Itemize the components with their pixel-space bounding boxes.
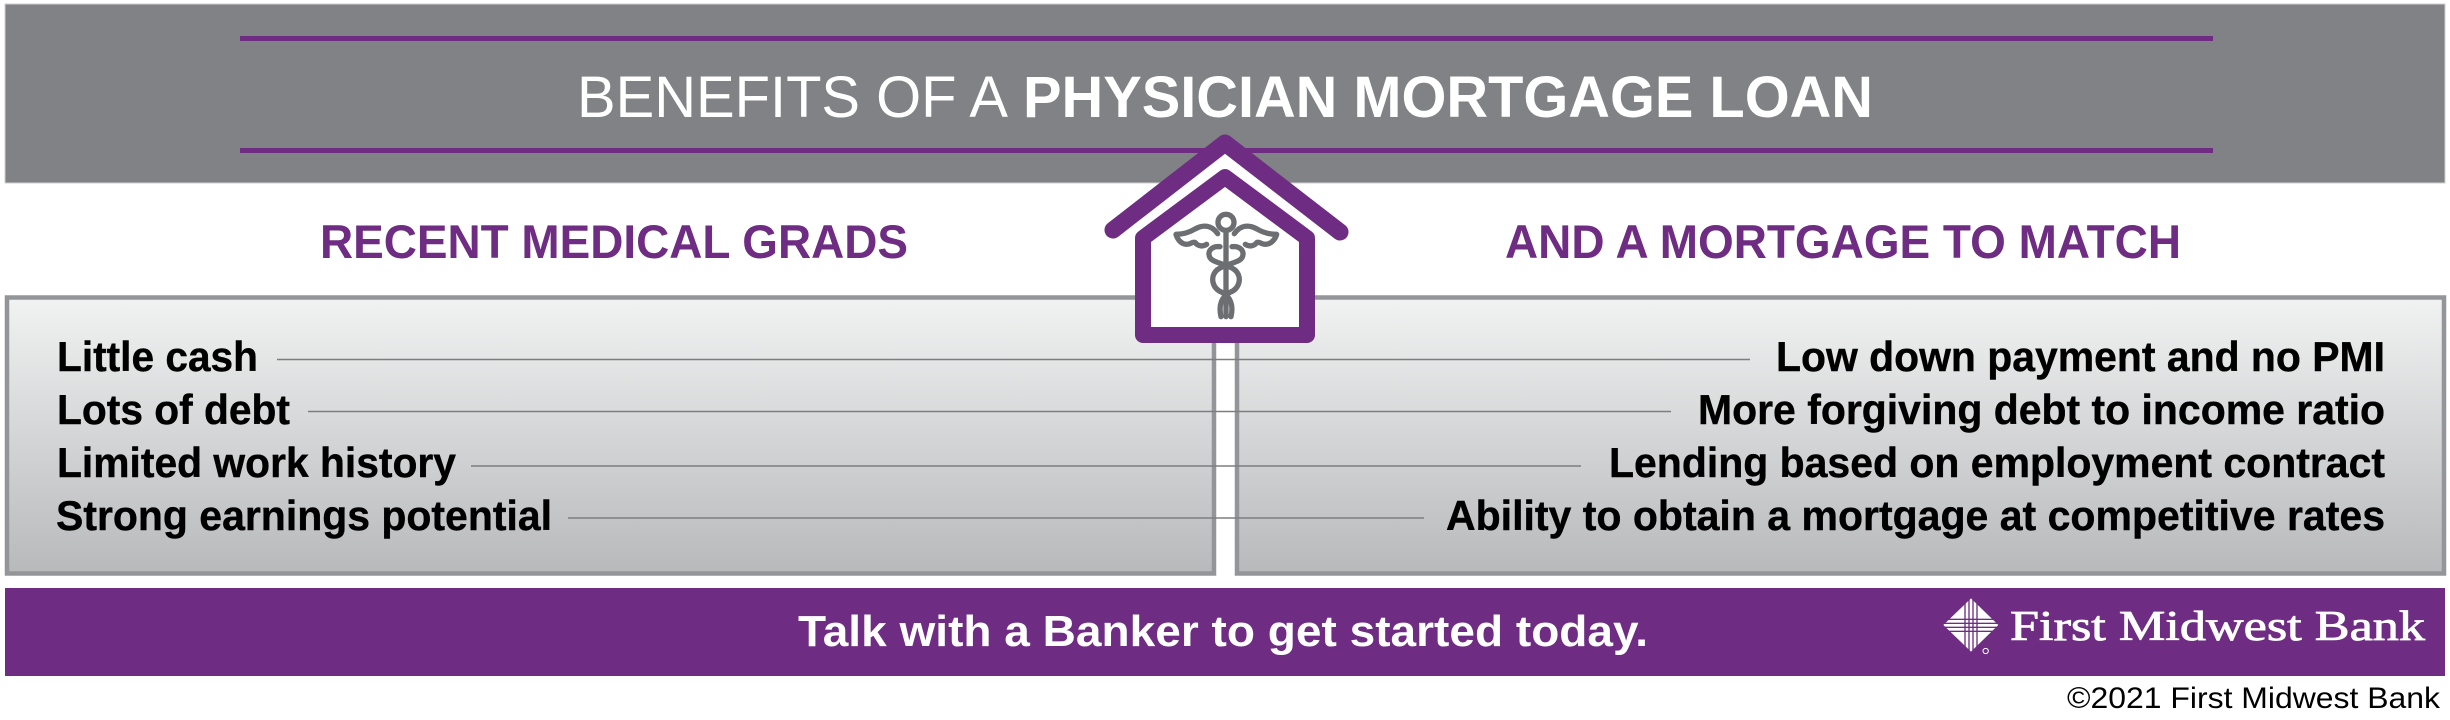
icon: bank logo — [1942, 597, 2000, 654]
text: little cash: Little cash — [57, 333, 258, 380]
copyright: ©2021 First Midwest Bank — [2067, 682, 2441, 715]
text: lots of debt: Lots of debt — [57, 386, 290, 433]
text: strong earnings potential: Strong earnings potential — [56, 492, 552, 539]
icon: house with caduceus — [1113, 143, 1340, 335]
bank name: First Midwest Bank — [2010, 604, 2425, 650]
title: BENEFITS OF A — [577, 65, 1008, 130]
icon: caduceus — [1176, 214, 1277, 317]
text: limited work history: Limited work history — [57, 439, 456, 486]
text: low down payment: Low down payment and no PMI — [1776, 333, 2385, 380]
title: PHYSICIAN MORTGAGE LOAN — [1023, 65, 1873, 130]
panel: a mortgage to match — [1237, 298, 2444, 574]
footer bar — [5, 588, 2445, 676]
call to action: Talk with a Banker to get started today. — [798, 607, 1648, 656]
panel: recent medical grads — [7, 298, 1214, 574]
connector lines — [277, 360, 1750, 518]
heading: recent medical grads: RECENT MEDICAL GRADS — [320, 215, 908, 268]
heading: and a mortgage to match: AND A MORTGAGE TO MATCH — [1505, 215, 2181, 268]
header banner — [5, 4, 2445, 183]
text: debt to income: More forgiving debt to income ratio — [1698, 386, 2385, 433]
text: competitive rates: Ability to obtain a mortgage at competitive rates — [1446, 492, 2385, 539]
title — [577, 65, 1873, 130]
text: employment contract: Lending based on employment contract — [1609, 439, 2385, 486]
